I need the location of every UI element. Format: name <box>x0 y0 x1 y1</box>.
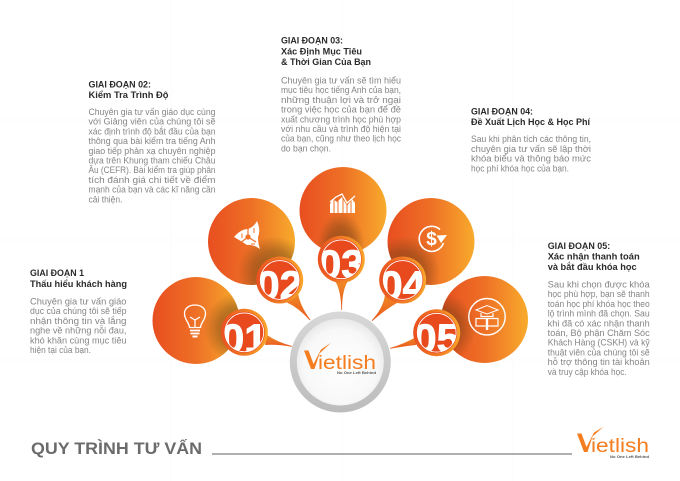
phase 3 text block: Xác Định Mục Tiêu <box>281 46 362 58</box>
phase 3 text block: & Thời Gian Của Bạn <box>281 57 371 68</box>
phase 1 text block: GIAI ĐOẠN 1 <box>30 268 85 279</box>
phase 4 text block <box>471 106 592 173</box>
phase 5 text block: Xác nhận thanh toán <box>548 252 640 262</box>
phase 5 text block: GIAI ĐOẠN 05: <box>548 241 610 252</box>
icon: dollar cycle: $ <box>426 229 437 250</box>
phase 2 text block: giao tiếp phản xạ chuyên nghiệp <box>88 146 216 156</box>
phase 4 text block: Sau khi phân tích các thông tin, <box>471 134 591 144</box>
phase 3 text block: mục tiêu học tiếng Anh của bạn, <box>281 85 401 95</box>
phase 4 text block: chuyên gia tư vấn sẽ lập thời <box>471 144 591 154</box>
phase 5 text block: toán, Bộ phận Chăm Sóc <box>548 328 650 338</box>
phase 2 text block: với Giảng viên của chúng tôi sẽ <box>88 117 216 127</box>
step 4 circle with dollar icon <box>388 198 474 285</box>
step 1 circle with bulb icon <box>152 277 238 364</box>
phase 2 text block: Âu (CEFR). Bài kiểm tra giúp phân <box>88 165 216 175</box>
phase 1 text block: khó khăn cùng mục tiêu <box>30 335 126 345</box>
footer logo: No One Left Behind <box>610 455 650 459</box>
phase 1 text block: dục của chúng tôi sẽ tiếp <box>30 306 126 316</box>
step 3 circle with chart icon <box>300 167 386 250</box>
footer rule <box>212 453 572 455</box>
phase 2 text block: Chuyên gia tư vấn giáo dục cùng <box>88 107 216 117</box>
phase 2 text block: xác định trình độ bắt đầu của bạn <box>88 126 216 136</box>
logo: Vietlish: No One Left Behind <box>337 371 377 375</box>
phase 4 text block: GIAI ĐOẠN 04: <box>471 106 533 118</box>
footer title: QUY TRÌNH TƯ VẤN <box>31 439 202 458</box>
logo: Vietlish <box>304 343 377 375</box>
phase 4 text block: Đề Xuất Lịch Học & Học Phí <box>471 117 590 128</box>
phase 5 text block: và truy cập khóa học. <box>548 367 627 377</box>
phase 2 text block: Kiểm Tra Trình Độ <box>88 90 169 101</box>
phase 5 text block: toán học phí khóa học theo <box>548 299 650 309</box>
phase 1 text block: hiện tại của bạn. <box>30 345 91 355</box>
phase 1 text block: Chuyên gia tư vấn giáo <box>30 296 127 306</box>
icon: bar chart <box>330 194 355 213</box>
phase 1 text block: Thấu hiểu khách hàng <box>30 279 127 290</box>
phase 5 text block: thuật viên của chúng tôi sẽ <box>548 347 650 357</box>
phase 5 text block: và bắt đầu khóa học <box>548 261 637 273</box>
step 2 circle with warning icon <box>208 198 295 285</box>
badge 04: 04 <box>380 264 426 308</box>
phase 3 text block: với nhu cầu và trình độ hiện tại <box>281 124 401 134</box>
phase 2 text block: dựa trên Khung tham chiếu Châu <box>88 156 216 166</box>
badge 05: 05 <box>414 317 460 361</box>
icon: graduation cap and diploma <box>469 298 505 335</box>
phase 2 text block: GIAI ĐOẠN 02: <box>88 80 151 90</box>
phase 4 text block: học phí khóa học của bạn. <box>471 163 569 173</box>
phase 3 text block: xuất chương trình học phù hợp <box>281 114 401 124</box>
connector tails <box>265 281 418 349</box>
icon: light bulb <box>184 305 206 336</box>
phase 1 text block: nghe về những nỗi đau, <box>30 326 127 336</box>
phase 3 text block: của bạn, cũng như theo lịch học <box>281 134 401 144</box>
phase 3 text block <box>281 36 401 153</box>
phase 2 text block: tích đánh giá chi tiết về điểm <box>88 175 216 185</box>
phase 3 text block: GIAI ĐOẠN 03: <box>281 36 343 46</box>
badge 03: 03 <box>318 243 364 287</box>
phase 2 text block: thông qua bài kiểm tra tiếng Anh <box>88 136 216 146</box>
phase 3 text block: Chuyên gia tư vấn sẽ tìm hiểu <box>281 76 401 86</box>
center hub with logo <box>290 312 391 412</box>
phase 1 text block: nhận thông tin và lắng <box>30 316 126 326</box>
phase 1 text block <box>30 268 127 355</box>
phase 5 text block: Khách Hàng (CSKH) và kỹ <box>548 338 650 348</box>
phase 5 text block: Sau khi chọn được khóa <box>548 280 650 290</box>
icon: three-part question mark badge <box>234 221 260 249</box>
phase 4 text block: khóa biểu và thông báo mức <box>471 154 592 164</box>
phase 2 text block <box>88 80 216 204</box>
badge 02: 02 <box>257 264 303 308</box>
phase 2 text block: cải thiện. <box>88 194 122 204</box>
phase 5 text block: khi đã có xác nhận thanh <box>548 318 650 328</box>
phase 5 text block <box>548 241 650 377</box>
phase 5 text block: lộ trình mình đã chọn. Sau <box>548 309 650 319</box>
phase 2 text block: mạnh của bạn và các kĩ năng cần <box>88 185 216 195</box>
step 5 circle with graduation icon <box>442 276 528 363</box>
phase 3 text block: do bạn chọn. <box>281 143 331 153</box>
footer logo: ietlish <box>591 436 649 457</box>
badge 01: 01 <box>221 317 267 361</box>
phase 3 text block: những thuận lợi và trở ngại <box>281 95 401 105</box>
phase 5 text block: hỗ trợ thông tin tài khoản <box>548 357 650 367</box>
phase 5 text block: học phù hợp, bạn sẽ thanh <box>548 289 650 299</box>
footer logo <box>577 427 650 459</box>
phase 3 text block: trong việc học của bạn để đề <box>281 105 401 115</box>
logo: Vietlish: ietlish <box>318 353 376 374</box>
